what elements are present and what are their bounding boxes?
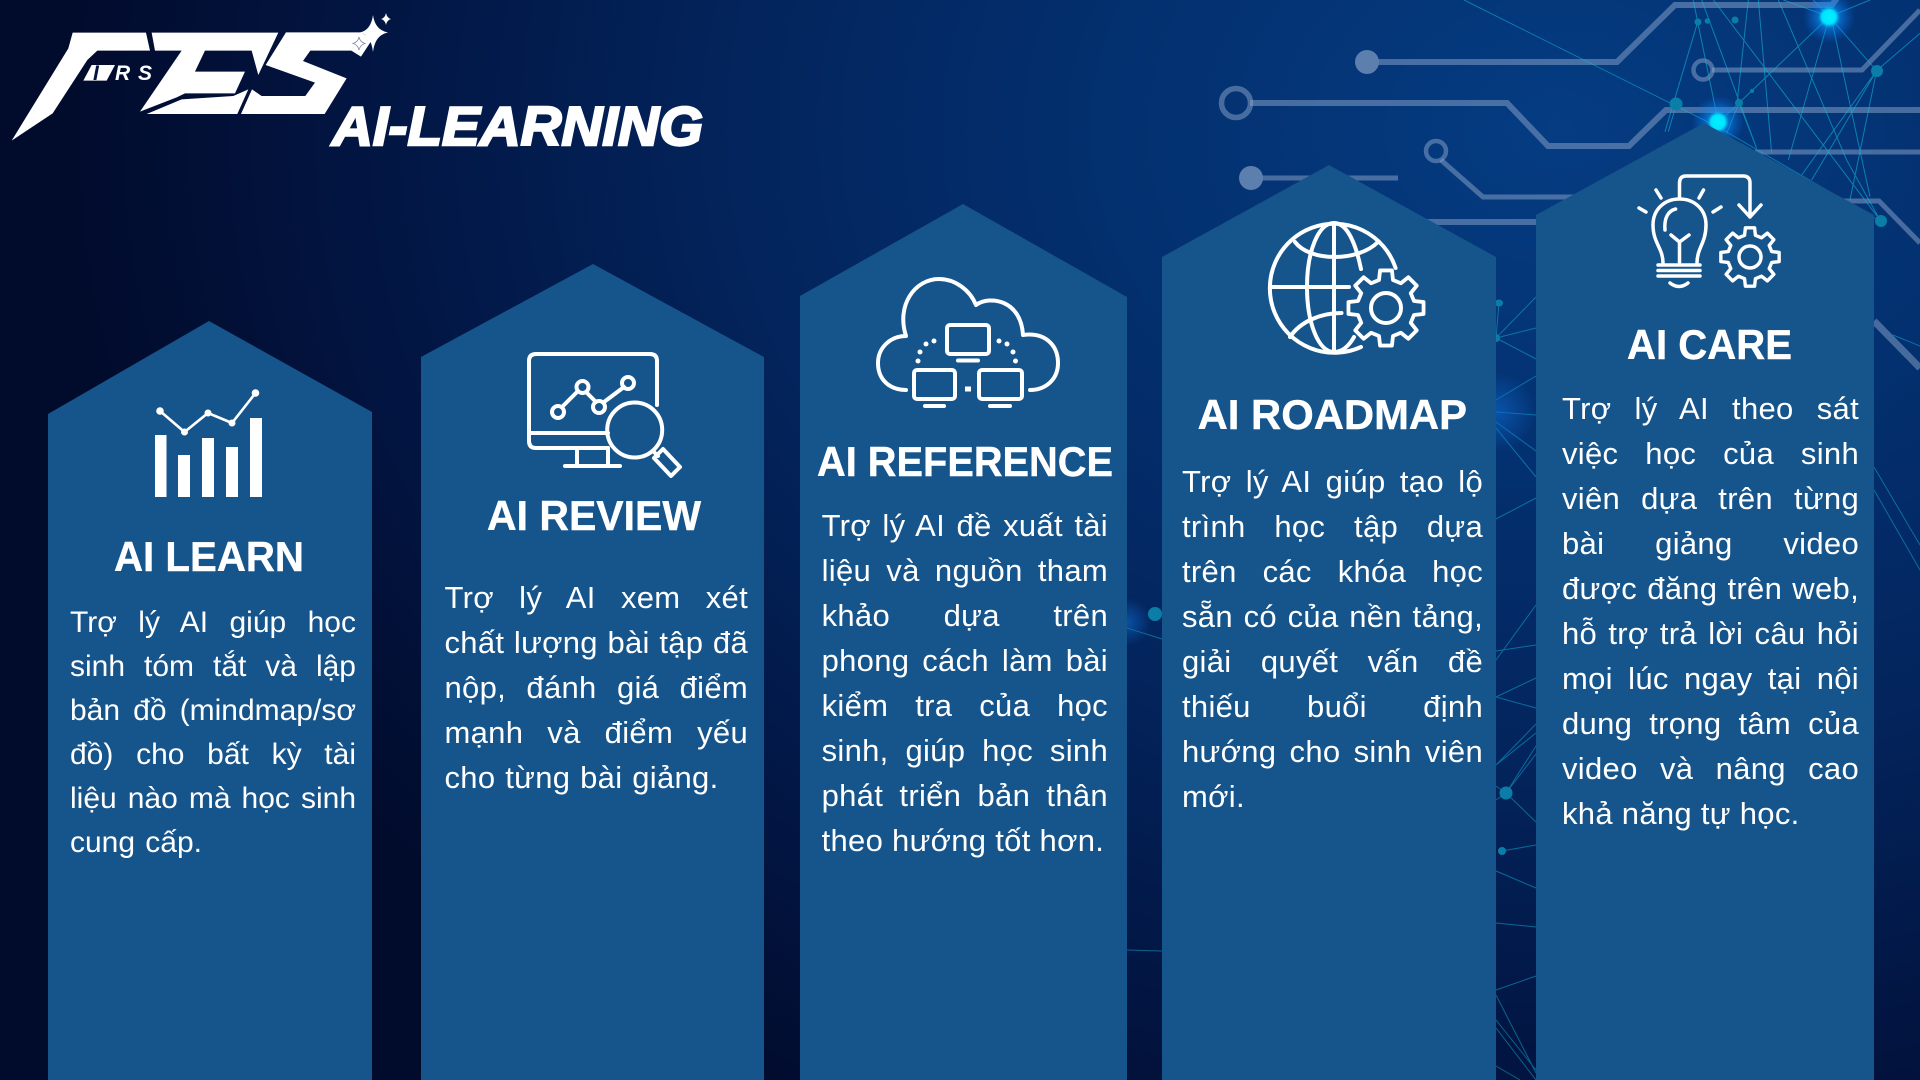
text: AI CARE description [1562, 391, 1859, 831]
icon: monitor with magnifier [529, 354, 680, 476]
text: AI ROADMAP description: Trợ lý AI giúp tạo lộ [1182, 464, 1483, 499]
text: AI CARE description: hỗ trợ trả lời câu hỏi [1562, 616, 1859, 651]
text: AI REFERENCE description: khảo dựa trên [822, 598, 1108, 633]
text: AI CARE description: việc học của sinh [1562, 436, 1859, 471]
text: AI LEARN description: Trợ lý AI giúp học [70, 606, 356, 639]
text: AI CARE description: mọi lúc ngay tại nội [1562, 661, 1859, 696]
text: AI REVIEW description: nộp, đánh giá điểm [444, 670, 748, 705]
text: AI CARE description: bài giảng video [1562, 526, 1859, 561]
heading: AI REVIEW: AI REVIEW [487, 492, 701, 539]
panel: AI CARE [1536, 123, 1874, 1080]
text: AI REVIEW description [444, 580, 748, 795]
logo small letters: R [115, 62, 131, 85]
text: AI CARE description: viên dựa trên từng [1562, 481, 1859, 516]
text: AI ROADMAP description: mới. [1182, 779, 1245, 814]
text: AI CARE description: được đăng trên web, [1562, 571, 1859, 606]
logo small letters [93, 62, 152, 85]
heading: AI ROADMAP: AI ROADMAP [1198, 391, 1467, 438]
text: AI REFERENCE description: Trợ lý AI đề xuất tài [822, 508, 1108, 543]
text: AI ROADMAP description [1182, 464, 1483, 814]
logo small letters: S [138, 62, 152, 85]
text: AI ROADMAP description: hướng cho sinh viên [1182, 734, 1483, 769]
logo mark: FES letters [12, 32, 372, 141]
text: AI CARE description: khả năng tự học. [1562, 796, 1800, 831]
text: AI LEARN description: đồ) cho bất kỳ tài [70, 738, 356, 771]
panel: AI ROADMAP [1162, 165, 1496, 1080]
text: AI ROADMAP description: sẵn có của nền tảng, [1182, 599, 1483, 634]
logo sparkles [360, 13, 391, 52]
text: AI REFERENCE description: kiểm tra của học [822, 688, 1108, 723]
icon: bar and line chart [155, 389, 262, 497]
text: AI ROADMAP description: trình học tập dựa [1182, 509, 1483, 544]
text: AI LEARN description: bản đồ (mindmap/sơ [70, 694, 356, 727]
text: AI ROADMAP description: thiếu buổi định [1182, 689, 1483, 724]
text: AI REVIEW description: Trợ lý AI xem xét [444, 580, 748, 615]
text: AI REFERENCE description: liệu và nguồn tham [822, 553, 1108, 588]
text: AI REFERENCE description [822, 508, 1108, 858]
text: AI LEARN description: liệu nào mà học sinh [70, 782, 356, 815]
text: AI REFERENCE description: sinh, giúp học sinh [822, 733, 1108, 768]
logo wordmark: AI-LEARNING [330, 95, 703, 157]
text: AI CARE description: dung trọng tâm của [1562, 706, 1859, 741]
text: AI LEARN description: sinh tóm tắt và lập [70, 650, 356, 683]
text: AI REVIEW description: cho từng bài giảng. [444, 760, 718, 795]
text: AI REFERENCE description: phong cách làm bài [822, 643, 1108, 678]
heading: AI CARE: AI CARE [1627, 321, 1792, 368]
text: AI REFERENCE description: phát triển bản thân [822, 778, 1108, 813]
text: AI CARE description: video và nâng cao [1562, 751, 1859, 786]
heading: AI REFERENCE: AI REFERENCE [817, 438, 1113, 485]
heading: AI LEARN: AI LEARN [114, 533, 304, 580]
text: AI ROADMAP description: trên các khóa học [1182, 554, 1483, 589]
icon: light bulb with gear and arrow [1639, 176, 1779, 286]
text: AI CARE description: Trợ lý AI theo sát [1562, 391, 1859, 426]
text: AI LEARN description [70, 606, 356, 859]
panel: AI LEARN [48, 321, 372, 1080]
panel: AI REFERENCE [800, 204, 1127, 1080]
text: AI REVIEW description: mạnh và điểm yếu [444, 715, 748, 750]
panel: AI REVIEW [421, 264, 764, 1080]
icon: cloud network [878, 279, 1058, 406]
logo small letters: I [93, 62, 100, 85]
text: AI ROADMAP description: giải quyết vấn đề [1182, 644, 1483, 679]
text: AI REFERENCE description: theo hướng tốt hơn. [822, 823, 1104, 858]
icon: globe with gear [1270, 223, 1424, 353]
logo: FES AI-Learning [12, 13, 703, 157]
text: AI LEARN description: cung cấp. [70, 826, 202, 859]
text: AI REVIEW description: chất lượng bài tập đã [444, 625, 748, 660]
